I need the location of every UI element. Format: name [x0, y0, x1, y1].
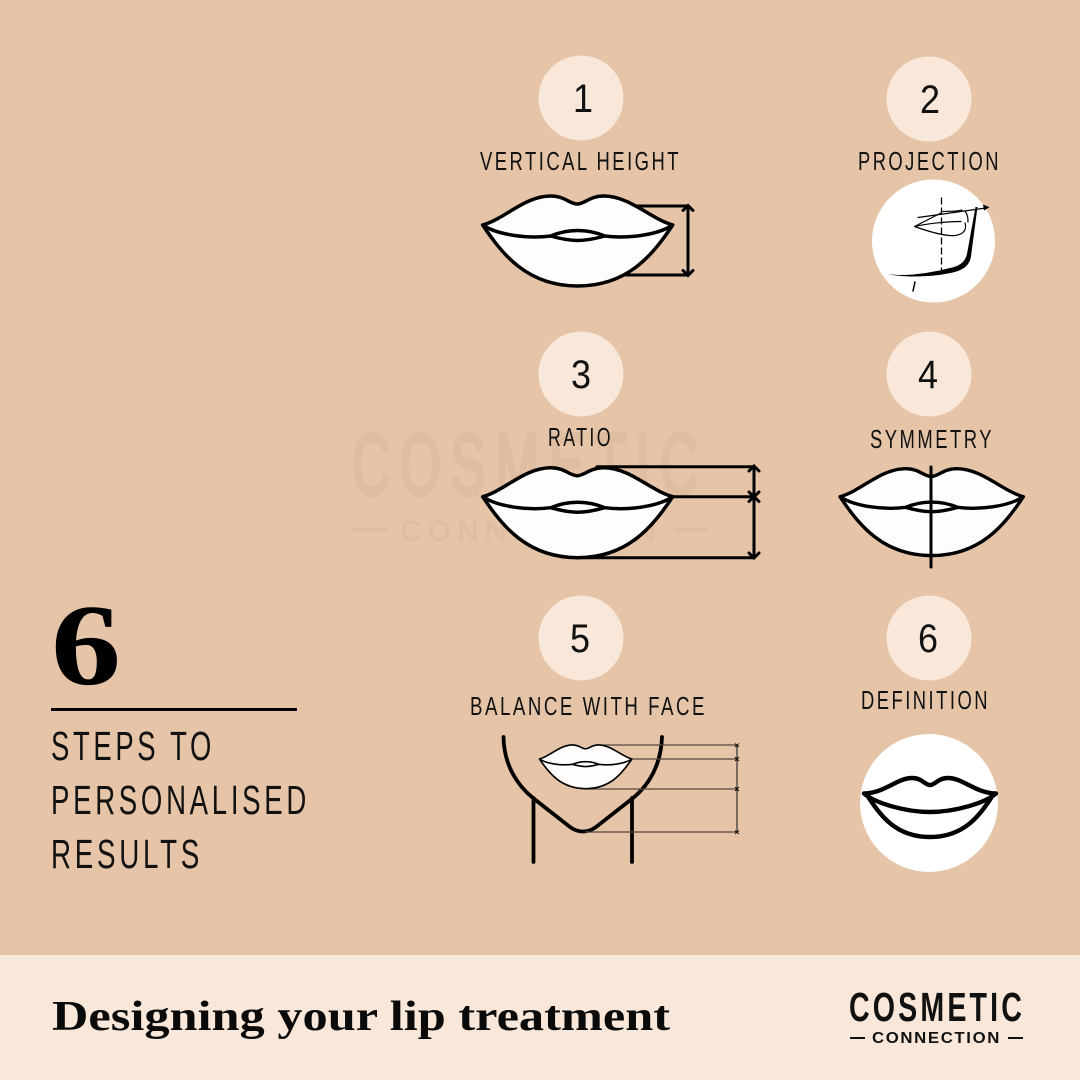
brand logo: CONNECTION	[872, 1030, 1001, 1047]
number badge 5	[538, 596, 624, 680]
number badge 2	[886, 56, 972, 142]
number badge 1	[538, 56, 624, 140]
label: vertical height: VERTICAL HEIGHT	[480, 146, 681, 176]
lips with ratio arrows	[483, 466, 759, 558]
subheading: RESULTS	[51, 831, 203, 877]
step 3: ratio	[483, 332, 759, 558]
lips with height arrow	[483, 196, 693, 286]
profile diagram in white circle	[872, 180, 995, 302]
lips with centre line	[840, 467, 1023, 567]
number badge 2: 2	[920, 78, 940, 122]
label: symmetry: SYMMETRY	[870, 424, 994, 454]
footer band	[0, 955, 1080, 1080]
number badge 6: 6	[918, 617, 938, 661]
watermark logo	[352, 417, 708, 548]
watermark logo: COSMETIC	[352, 417, 708, 513]
rule	[51, 708, 297, 711]
step 2: projection	[858, 56, 1001, 302]
headline block	[51, 582, 310, 877]
label: projection: PROJECTION	[858, 146, 1001, 176]
bold lips in white circle	[860, 734, 998, 872]
step 4: symmetry	[840, 332, 1023, 567]
subheading	[51, 723, 310, 877]
step 6: definition	[860, 596, 998, 872]
number badge 1: 1	[573, 77, 593, 121]
step 5: balance with face	[470, 596, 739, 862]
subheading: PERSONALISED	[51, 777, 310, 823]
big number 6: 6	[51, 582, 121, 710]
label: balance with face: BALANCE WITH FACE	[470, 691, 707, 721]
number badge 5: 5	[570, 617, 590, 661]
subheading: STEPS TO	[51, 723, 215, 769]
label: ratio: RATIO	[548, 422, 613, 452]
label: definition: DEFINITION	[861, 685, 990, 715]
footer title: Designing your lip treatment	[52, 994, 670, 1040]
number badge 4	[886, 332, 972, 416]
number badge 3: 3	[571, 353, 591, 397]
face outline with lips and guides	[504, 737, 739, 862]
number badge 3	[538, 332, 624, 416]
number badge 6	[886, 596, 972, 680]
brand logo	[849, 984, 1025, 1047]
step 1: vertical height	[480, 56, 693, 286]
number badge 4: 4	[918, 353, 938, 397]
watermark logo: CONNECTION	[400, 515, 662, 548]
